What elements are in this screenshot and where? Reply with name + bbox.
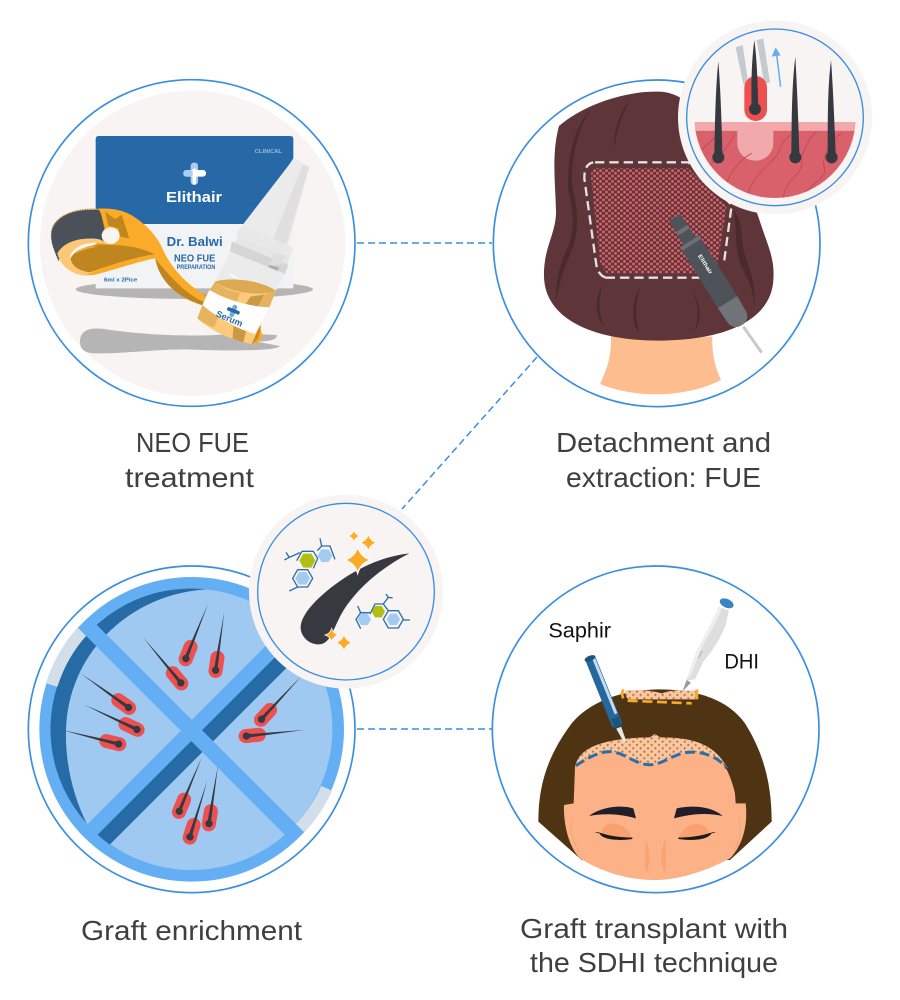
follicle <box>301 553 409 644</box>
hair <box>544 92 774 341</box>
ear details <box>571 817 740 853</box>
magnifier: enriched follicle <box>249 495 443 689</box>
dashed extraction border <box>584 162 732 278</box>
hair strands <box>556 100 755 333</box>
hairline transplant zone <box>576 734 727 767</box>
caption: NEO FUE treatment: treatment <box>125 462 254 493</box>
panel: NEO FUE treatment illustration <box>28 80 355 406</box>
white label <box>202 290 269 334</box>
serum label: Serum <box>215 309 244 329</box>
nose shading <box>645 839 666 873</box>
circle outline <box>28 566 355 893</box>
hair <box>538 689 772 860</box>
handle tip <box>250 327 263 345</box>
floor shadow <box>80 328 280 353</box>
caption: Graft transplant: Graft transplant with <box>520 913 788 944</box>
eyelashes <box>595 832 716 840</box>
eyebrows <box>589 807 723 818</box>
dark inner fold <box>71 245 155 272</box>
bottle backing <box>231 226 292 274</box>
caption: Detachment and extraction: extraction: FUE <box>566 462 761 493</box>
dashed hairline <box>576 752 727 768</box>
neck <box>600 337 721 394</box>
connector: graft enrichment to transplant <box>357 728 492 730</box>
tip of handle behind jar <box>248 325 261 344</box>
tool brand: Elithair <box>696 254 713 276</box>
dropper cone <box>240 158 309 250</box>
caption: Graft transplant: the SDHI technique <box>530 947 778 978</box>
panel: graft transplant illustration <box>492 566 819 893</box>
logo cross <box>183 163 206 185</box>
panel: detachment and extraction illustration <box>493 20 872 407</box>
caption: Detachment and extraction: Detachment and <box>556 427 771 458</box>
product box <box>96 136 293 288</box>
preparation: PREPARATION <box>177 264 215 271</box>
serum label logo <box>225 303 242 319</box>
circle outline <box>28 80 355 406</box>
jar body <box>197 282 276 344</box>
connector: FUE to graft enrichment <box>402 357 537 509</box>
donor patch <box>622 689 697 703</box>
bottle neck <box>215 252 285 291</box>
caption: Graft enrichment: Graft enrichment <box>81 915 302 946</box>
box text: clinical: CLINICAL <box>255 149 283 155</box>
molecule top <box>284 538 335 591</box>
DHI pen <box>682 596 735 692</box>
petri dish <box>39 577 344 882</box>
red follicle capsule <box>744 76 767 121</box>
circle outline <box>492 566 819 893</box>
Saphir pen <box>584 654 629 744</box>
arrow up <box>777 55 781 87</box>
collar <box>237 226 292 256</box>
magnifier: follicle extraction <box>678 20 872 214</box>
hairs <box>712 40 838 163</box>
serum bottle <box>197 158 309 344</box>
label: DHI: DHI <box>724 650 759 673</box>
box shadow <box>76 280 313 299</box>
bristle head <box>51 210 108 260</box>
connector: NEO FUE to FUE <box>357 242 492 244</box>
label: Saphir: Saphir <box>548 619 611 642</box>
doctor name: Dr. Balwi <box>167 235 223 249</box>
derma roller <box>51 209 263 345</box>
brand name: Elithair <box>166 190 222 206</box>
extraction area dots <box>591 168 727 273</box>
skin layers <box>694 122 856 198</box>
circle outline <box>493 80 820 407</box>
product name: NEO FUE <box>174 254 216 265</box>
extraction needle <box>743 327 762 353</box>
face <box>564 734 746 880</box>
grip hole <box>102 227 120 244</box>
extraction tool <box>665 211 752 331</box>
handle main <box>73 209 209 302</box>
handle underside <box>155 257 210 306</box>
volume: 6ml x 2Pice <box>104 277 137 283</box>
beige disc <box>40 91 345 396</box>
light crescent <box>57 239 108 276</box>
sparkles <box>325 530 377 651</box>
panel: graft enrichment illustration <box>28 495 443 893</box>
grafts <box>60 602 306 846</box>
caption: NEO FUE treatment: NEO FUE <box>136 427 249 458</box>
eyelids <box>602 824 709 839</box>
molecule bottom <box>356 594 410 629</box>
grip teeth <box>105 212 129 238</box>
tweezers <box>736 39 770 84</box>
